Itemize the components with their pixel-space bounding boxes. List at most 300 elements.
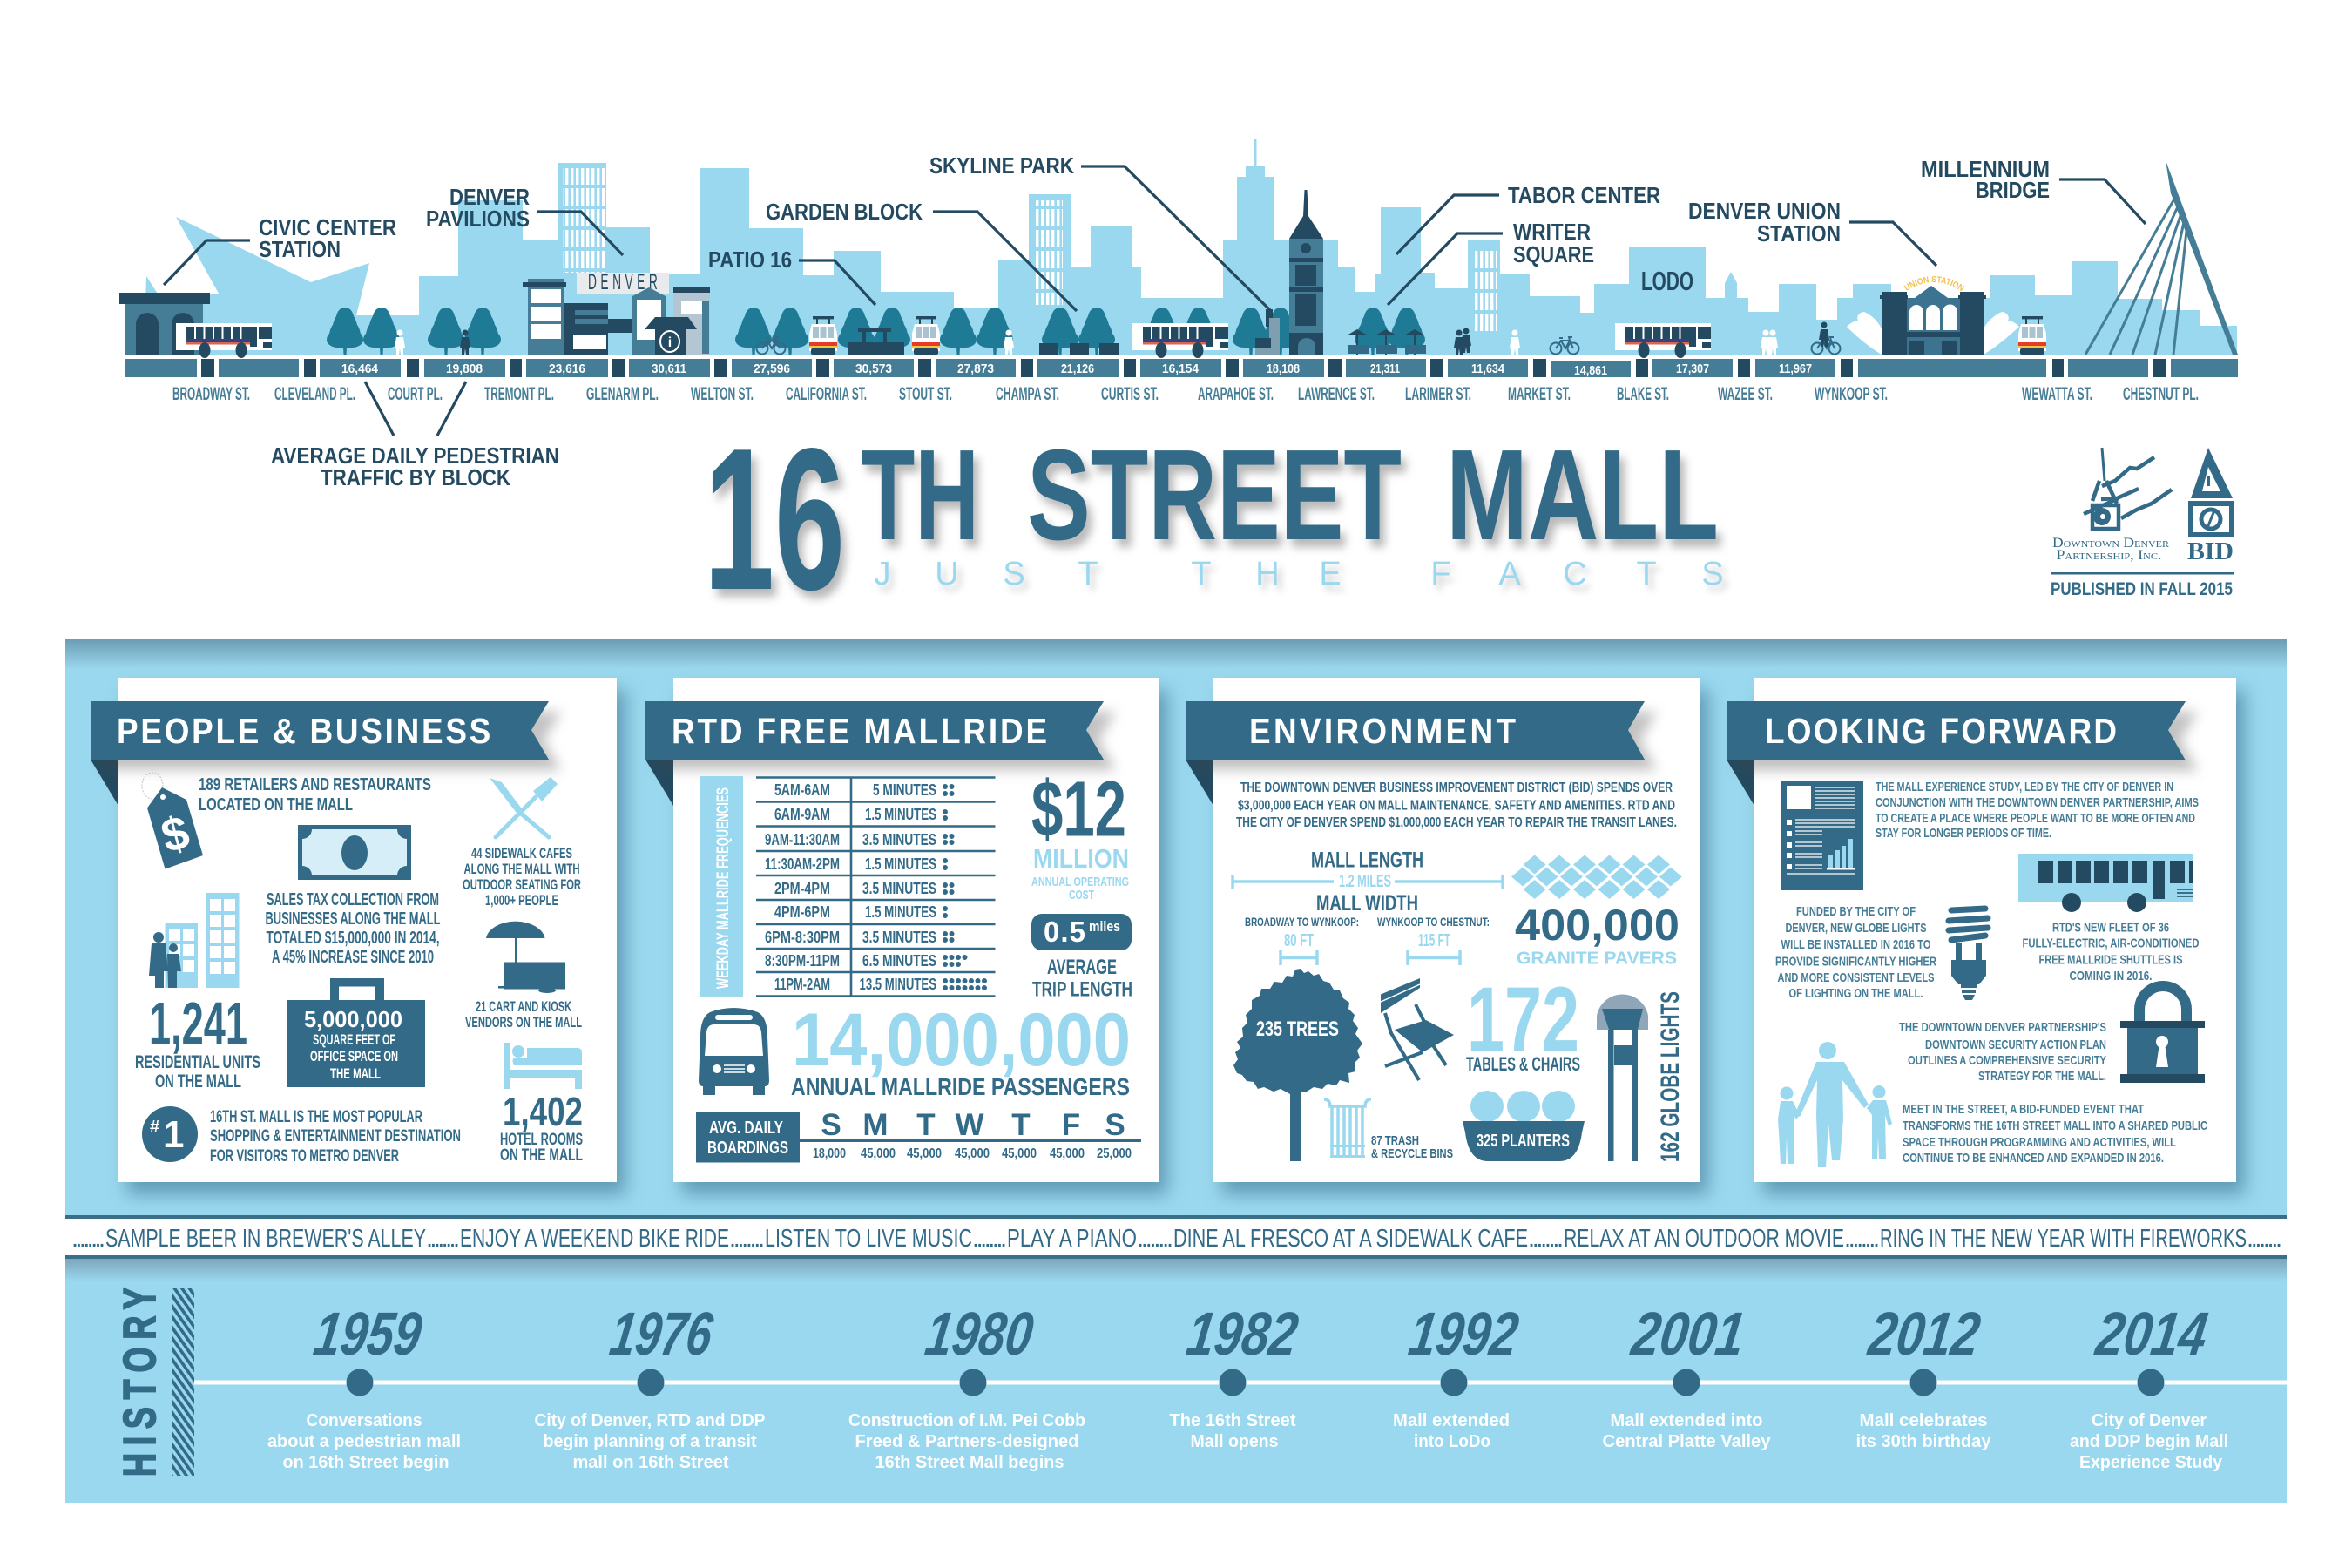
milestone 2014: 2014: [2091, 1299, 2212, 1368]
title main text: TH: [861, 423, 979, 567]
milestone 2014: Experience Study: [2079, 1453, 2223, 1472]
traffic counts: 27,873: [957, 362, 994, 376]
diagram: mall length: [1233, 848, 1503, 891]
icon: family silhouette: [1778, 1042, 1892, 1167]
table minutes column: [859, 781, 936, 993]
logo: bid tower: BID: [2187, 537, 2234, 565]
table time column: 8:30PM-11PM: [765, 952, 840, 970]
milestone 1992: Mall extended: [1393, 1411, 1510, 1430]
chart: average daily boardings: AVG. DAILY: [709, 1119, 783, 1138]
text: cart and kiosk vendors: VENDORS ON THE MALL: [465, 1014, 582, 1031]
trees: [327, 308, 1425, 355]
traffic counts: 16,154: [1162, 362, 1200, 376]
stat: 1,241 residential units: ON THE MALL: [155, 1071, 241, 1092]
title main text: MALL: [1446, 423, 1719, 567]
street names: BLAKE ST.: [1617, 384, 1669, 404]
stat: 1,241 residential units: [135, 990, 260, 1092]
milestone 1976: [535, 1299, 765, 1472]
icon: padlock: [2120, 986, 2205, 1083]
stat: annual passengers: ANNUAL MALLRIDE PASSENGERS: [791, 1073, 1130, 1100]
panel card: [1754, 678, 2236, 1182]
text: mall experience study: [1876, 780, 2199, 841]
chart: average daily boardings: 45,000: [861, 1146, 896, 1161]
activities text: SAMPLE BEER IN BREWER'S ALLEY: [105, 1225, 426, 1253]
milestone 1982: The 16th Street: [1169, 1411, 1296, 1430]
history timeline: [114, 1288, 2287, 1477]
table minutes column: 3.5 MINUTES: [862, 831, 936, 848]
milestone 1980: [848, 1299, 1085, 1472]
street names: WAZEE ST.: [1718, 384, 1773, 404]
stat: 162 globe lights: 162 GLOBE LIGHTS: [1656, 991, 1685, 1162]
traffic counts: 30,611: [652, 362, 686, 376]
chart: average daily boardings: 45,000: [1050, 1146, 1085, 1161]
activities text: ........: [729, 1225, 765, 1253]
callout: denver pavilions: [426, 184, 623, 255]
chart: average daily boardings: F: [1062, 1108, 1080, 1142]
street names: ARAPAHOE ST.: [1198, 384, 1274, 404]
icon: clock tower: [1289, 190, 1323, 355]
street names: CURTIS ST.: [1101, 384, 1159, 404]
main blue background panel: [65, 639, 2287, 1503]
street names: MARKET ST.: [1508, 384, 1571, 404]
badge: number one: #: [150, 1118, 159, 1137]
street names: BROADWAY ST.: [172, 384, 250, 404]
text: mall experience study: TO CREATE A PLACE WHERE PEOPLE WANT TO BE MORE OFTEN AND: [1876, 811, 2195, 826]
subtitle: just the facts: JUST THE FACTS: [875, 556, 1724, 592]
chart: average daily boardings: 25,000: [1097, 1146, 1132, 1161]
milestone 1959: 1959: [310, 1299, 426, 1368]
text: sales tax: A 45% INCREASE SINCE 2010: [272, 948, 434, 967]
street names: STOUT ST.: [899, 384, 952, 404]
table minutes column: 1.5 MINUTES: [865, 855, 936, 873]
milestone 1976: mall on 16th Street: [573, 1453, 729, 1472]
panel card: [118, 678, 617, 1182]
traffic counts: 16,464: [341, 362, 379, 376]
milestone 1976: begin planning of a transit: [544, 1432, 757, 1451]
diagram: mall length: 1.2 MILES: [1339, 872, 1391, 891]
icon: granite pavers diamonds: [1511, 855, 1682, 899]
stat: 1,241 residential units: RESIDENTIAL UNITS: [135, 1052, 260, 1072]
street bar with block traffic counts: [125, 359, 2238, 378]
text: mall experience study: THE MALL EXPERIENCE STUDY, LED BY THE CITY OF DENVER IN: [1876, 780, 2173, 794]
stat: 12 million operating cost: $12: [1031, 767, 1126, 854]
activities strip: [65, 1215, 2287, 1281]
diagram: mall length: MALL LENGTH: [1311, 848, 1423, 873]
stat: office space briefcase: OFFICE SPACE ON: [310, 1048, 398, 1064]
icon: denver pavilions: [523, 271, 710, 355]
text: globe lights funding: AND MORE CONSISTENT LEVELS: [1777, 970, 1934, 985]
table time column: 5AM-6AM: [774, 781, 830, 799]
stat: 172 tables and chairs: TABLES & CHAIRS: [1466, 1053, 1580, 1075]
icon: planter with count: [1463, 1091, 1585, 1161]
text: sidewalk cafes: [463, 845, 581, 909]
milestone 1976: City of Denver, RTD and DDP: [535, 1411, 765, 1430]
skyline background buildings: [144, 139, 2237, 355]
icon: tree with count: 235 TREES: [1256, 1017, 1339, 1041]
chart: average daily boardings: BOARDINGS: [707, 1139, 788, 1158]
sidebar: weekday frequencies: [700, 776, 743, 997]
table minutes column: 1.5 MINUTES: [865, 903, 936, 921]
table time column: [765, 781, 840, 993]
traffic counts: 18,108: [1267, 362, 1300, 376]
block segments: [125, 359, 2238, 377]
text: retailers: LOCATED ON THE MALL: [199, 795, 353, 814]
text: cart and kiosk vendors: 21 CART AND KIOSK: [476, 998, 571, 1015]
table minutes column: 13.5 MINUTES: [859, 976, 936, 993]
text: meet in the street: MEET IN THE STREET, A BID-FUNDED EVENT THAT: [1903, 1102, 2144, 1117]
traffic counts: 11,634: [1471, 362, 1505, 376]
icon: center bus: [1132, 323, 1228, 358]
icon: pedestrians and bikes: [395, 322, 1840, 355]
milestone 2012: its 30th birthday: [1855, 1432, 1991, 1451]
text: sales tax: TOTALED $15,000,000 IN 2014,: [267, 929, 439, 948]
title main text: [704, 407, 1719, 632]
milestone 1980: 1980: [922, 1299, 1037, 1368]
traffic counts: 19,808: [446, 362, 483, 376]
block dividers: [201, 359, 2166, 377]
diagram: mall width: 115 FT: [1418, 931, 1450, 950]
street names: CALIFORNIA ST.: [786, 384, 867, 404]
text: meet in the street: TRANSFORMS THE 16TH STREET MALL INTO A SHARED PUBLIC: [1903, 1119, 2207, 1133]
callout: writer square: WRITER: [1513, 219, 1591, 245]
table time column: 2PM-4PM: [774, 880, 830, 897]
icon: tram at union station: [2018, 316, 2046, 355]
text: retailers: 189 RETAILERS AND RESTAURANTS: [199, 775, 431, 794]
callout: tabor center: [1396, 182, 1660, 254]
chart: average daily boardings: M: [862, 1108, 889, 1142]
milestone 1992: 1992: [1405, 1299, 1523, 1368]
diagram: mall width: MALL WIDTH: [1316, 891, 1418, 916]
text: rtd new fleet: RTD'S NEW FLEET OF 36: [2052, 920, 2169, 936]
milestone 2001: Central Platte Valley: [1603, 1432, 1771, 1451]
callout: denver pavilions: PAVILIONS: [426, 206, 530, 232]
icon: bus at civic center: [176, 323, 272, 358]
callout: garden block: GARDEN BLOCK: [766, 199, 923, 225]
callout: denver union station: STATION: [1757, 220, 1841, 247]
stat: 12 million operating cost: MILLION: [1033, 843, 1129, 874]
activities text: ........: [1137, 1225, 1173, 1253]
panel: rtd free mallride: [645, 678, 1159, 1182]
icon: residential buildings: [149, 893, 239, 988]
stat: 1,402 hotel rooms: ON THE MALL: [500, 1146, 583, 1165]
activities text: ........: [1528, 1225, 1564, 1253]
panel: people and business: [91, 678, 617, 1182]
activities text: ........: [2247, 1225, 2282, 1253]
callout: patio 16: PATIO 16: [708, 247, 792, 273]
icon: planters: [1039, 343, 1119, 355]
traffic counts: 23,616: [549, 362, 585, 376]
ribbon heading: PEOPLE & BUSINESS: [117, 712, 490, 751]
street names: COURT PL.: [388, 384, 443, 404]
icon: cash bill: [298, 825, 411, 880]
activities text: ........: [972, 1225, 1007, 1253]
icon: vendor cart: [486, 922, 565, 993]
milestone 1992: [1393, 1299, 1523, 1451]
text: retailers: [199, 775, 431, 814]
icon: trash bin with count: [1324, 1099, 1453, 1161]
stat: office space briefcase: SQUARE FEET OF: [313, 1031, 395, 1048]
chart: average daily boardings: S: [1105, 1108, 1125, 1142]
icon: bus in lodo: [1615, 323, 1711, 358]
title main text: STREET: [1027, 423, 1402, 567]
street names: GLENARM PL.: [586, 384, 659, 404]
text: cart and kiosk vendors: [465, 998, 582, 1031]
text: sales tax: [265, 890, 441, 967]
milestone 2001: Mall extended into: [1610, 1411, 1763, 1430]
text: most popular: [210, 1108, 461, 1166]
text: globe lights funding: [1775, 904, 1936, 1001]
activities text: PLAY A PIANO: [1007, 1225, 1137, 1253]
text: most popular: 16TH ST. MALL IS THE MOST POPULAR: [210, 1108, 422, 1126]
stat: office space briefcase: [287, 978, 425, 1087]
text: sidewalk cafes: 1,000+ PEOPLE: [485, 892, 558, 909]
panel card: [673, 678, 1159, 1182]
logo: downtown denver partnership: Partnership, Inc.: [2056, 548, 2162, 563]
icon: knife and fork: [490, 777, 558, 837]
chart: average daily boardings: 45,000: [955, 1146, 990, 1161]
title: [704, 407, 1724, 632]
icon: millennium bridge: [2085, 160, 2238, 355]
traffic counts: 11,967: [1779, 362, 1812, 376]
milestone 1959: on 16th Street begin: [282, 1453, 449, 1472]
callout: denver union station: [1688, 198, 1936, 266]
chart: average daily boardings: 45,000: [907, 1146, 942, 1161]
milestone 1980: Freed & Partners-designed: [855, 1432, 1078, 1451]
text: sidewalk cafes: OUTDOOR SEATING FOR: [463, 876, 581, 893]
table time column: 6PM-8:30PM: [765, 929, 840, 946]
icon: denver pavilions: DENVER: [588, 271, 658, 294]
traffic counts: 27,596: [754, 362, 790, 376]
timeline axis: [194, 1380, 2287, 1385]
street names: LAWRENCE ST.: [1298, 384, 1375, 404]
stat: annual passengers: 14,000,000: [792, 998, 1131, 1082]
stat: 1,402 hotel rooms: HOTEL ROOMS: [500, 1131, 583, 1149]
icon: bus front: [699, 1008, 769, 1095]
text: security plan: STRATEGY FOR THE MALL.: [1978, 1069, 2106, 1084]
text: meet in the street: SPACE THROUGH PROGRAMMING AND ACTIVITIES, WILL: [1903, 1135, 2176, 1150]
callout: average daily pedestrian traffic: [271, 382, 559, 490]
frequency table: [756, 777, 995, 997]
milestone 2012: [1855, 1299, 1991, 1451]
table minutes column: 3.5 MINUTES: [862, 880, 936, 897]
white cutouts near museum: [162, 217, 219, 301]
callout: millennium bridge: [1921, 156, 2146, 224]
traffic counts: 30,573: [855, 362, 892, 376]
callout: denver pavilions: DENVER: [449, 184, 530, 210]
skyline illustration: [119, 139, 2238, 358]
text: globe lights funding: OF LIGHTING ON THE MALL.: [1789, 986, 1923, 1001]
stat: office space briefcase: 5,000,000: [304, 1006, 402, 1032]
activities text: ENJOY A WEEKEND BIKE RIDE: [460, 1225, 729, 1253]
text: rtd new fleet: FULLY-ELECTRIC, AIR-CONDITIONED: [2023, 936, 2200, 951]
activities text: RELAX AT AN OUTDOOR MOVIE: [1564, 1225, 1844, 1253]
table minutes column: 5 MINUTES: [873, 781, 936, 799]
milestone 2014: and DDP begin Mall: [2070, 1432, 2228, 1451]
chart: average daily boardings: T: [1011, 1108, 1031, 1142]
stat: 12 million operating cost: ANNUAL OPERATING: [1031, 875, 1129, 889]
icon: tree with count: [1233, 969, 1362, 1161]
street names: LARIMER ST.: [1405, 384, 1471, 404]
milestone 1959: about a pedestrian mall: [267, 1432, 461, 1451]
text: sales tax: BUSINESSES ALONG THE MALL: [265, 909, 441, 929]
text: security plan: THE DOWNTOWN DENVER PARTNERSHIP'S: [1899, 1020, 2106, 1035]
ribbon heading: ENVIRONMENT: [1249, 712, 1516, 751]
landmark callouts: [164, 152, 2146, 490]
callout: skyline park: SKYLINE PARK: [929, 152, 1074, 179]
activities text: ........: [71, 1225, 105, 1253]
text: globe lights funding: PROVIDE SIGNIFICANTLY HIGHER: [1775, 955, 1936, 969]
icon: skyline park monument: [1255, 309, 1280, 355]
diagram: mall width: 80 FT: [1284, 931, 1314, 950]
text: sidewalk cafes: 44 SIDEWALK CAFES: [471, 845, 572, 862]
stat: 400,000 granite pavers: [1515, 901, 1680, 969]
milestone 1982: [1169, 1299, 1302, 1451]
label: lodo: LODO: [1641, 266, 1693, 296]
activities text: ........: [1844, 1225, 1880, 1253]
milestone 2012: Mall celebrates: [1859, 1411, 1988, 1430]
ribbon heading: [1727, 701, 2186, 806]
icon: union station: [1847, 276, 2019, 355]
table minutes column: 3.5 MINUTES: [862, 929, 936, 946]
callout: patio 16: [708, 247, 875, 305]
stat: average trip length: [1031, 914, 1132, 1002]
text: rtd new fleet: FREE MALLRIDE SHUTTLES IS: [2038, 953, 2183, 967]
icon: planter with count: 325 PLANTERS: [1477, 1132, 1570, 1151]
badge: number one: [142, 1106, 198, 1162]
badge: number one: 1: [163, 1113, 184, 1156]
text: bid spending: [1236, 781, 1677, 830]
traffic counts: 21,311: [1370, 362, 1400, 376]
icon: tram and patio: [809, 316, 940, 355]
activities text: [71, 1225, 2282, 1253]
milestone 1980: Construction of I.M. Pei Cobb: [848, 1411, 1085, 1430]
diagram: mall width: BROADWAY TO WYNKOOP:: [1245, 915, 1359, 929]
logo: downtown denver partnership: Downtown Denver: [2052, 536, 2170, 551]
text: security plan: [1899, 1020, 2106, 1084]
table time column: 4PM-6PM: [774, 903, 830, 921]
diagram: mall width: WYNKOOP TO CHESTNUT:: [1377, 915, 1490, 929]
text: rtd new fleet: COMING IN 2016.: [2070, 969, 2152, 983]
stat: 1,402 hotel rooms: 1,402: [503, 1089, 583, 1134]
milestone 1959: Conversations: [307, 1411, 422, 1430]
text: mall experience study: STAY FOR LONGER PERIODS OF TIME.: [1876, 826, 2051, 841]
chart: average daily boardings: [696, 1108, 1141, 1162]
stat: 12 million operating cost: [1031, 767, 1129, 902]
callout: tabor center: TABOR CENTER: [1508, 182, 1660, 208]
text: meet in the street: [1903, 1102, 2207, 1166]
table time column: 11PM-2AM: [774, 976, 830, 993]
text: most popular: FOR VISITORS TO METRO DENVER: [210, 1147, 399, 1166]
stat: average trip length: AVERAGE: [1047, 956, 1117, 979]
milestone 1982: 1982: [1183, 1299, 1302, 1368]
text: sidewalk cafes: ALONG THE MALL WITH: [463, 861, 580, 877]
panel: looking forward: [1727, 678, 2236, 1182]
icon: light bulb: [1949, 909, 1988, 1000]
activities text: LISTEN TO LIVE MUSIC: [765, 1225, 972, 1253]
panel card: [1213, 678, 1700, 1182]
text: most popular: SHOPPING & ENTERTAINMENT DESTINATION: [210, 1127, 461, 1146]
callout: denver union station: DENVER UNION: [1688, 198, 1841, 224]
callout: writer square: SQUARE: [1513, 241, 1594, 267]
diagram: mall width: [1245, 891, 1490, 965]
icon: trash bin with count: & RECYCLE BINS: [1371, 1146, 1453, 1161]
traffic counts: [341, 362, 1812, 378]
ribbon heading: LOOKING FORWARD: [1765, 712, 2117, 751]
callout: writer square: [1388, 219, 1594, 305]
text: globe lights funding: WILL BE INSTALLED IN 2016 TO: [1781, 937, 1931, 952]
callout: skyline park: [929, 152, 1271, 311]
ribbon heading: RTD FREE MALLRIDE: [672, 712, 1047, 751]
table minutes column: 1.5 MINUTES: [865, 806, 936, 823]
callout: millennium bridge: BRIDGE: [1976, 177, 2050, 203]
street names: CLEVELAND PL.: [274, 384, 355, 404]
text: mall experience study: CONJUNCTION WITH THE DOWNTOWN DENVER PARTNERSHIP, AIMS: [1876, 795, 2199, 810]
milestone 1982: Mall opens: [1190, 1432, 1279, 1451]
stat: 1,241 residential units: 1,241: [149, 990, 247, 1058]
callout: average daily pedestrian traffic: TRAFFIC BY BLOCK: [321, 464, 510, 490]
street names: WEWATTA ST.: [2022, 384, 2092, 404]
callout: civic center station: CIVIC CENTER: [259, 214, 396, 240]
table rules: [756, 777, 995, 997]
street names: WYNKOOP ST.: [1815, 384, 1888, 404]
text: globe lights funding: DENVER, NEW GLOBE LIGHTS: [1786, 921, 1927, 936]
milestone 2014: City of Denver: [2092, 1411, 2207, 1430]
icon: price tag: $: [156, 806, 195, 863]
callout: garden block: [766, 199, 1077, 311]
text: bid spending: THE DOWNTOWN DENVER BUSINESS IMPROVEMENT DISTRICT (BID) SPENDS OVER: [1240, 781, 1673, 795]
published note: PUBLISHED IN FALL 2015: [2051, 579, 2233, 599]
logo: bid tower: [2187, 448, 2234, 565]
icon: union station: UNION STATION: [1903, 276, 1964, 291]
icon: report document: [1781, 781, 1863, 890]
chart: average daily boardings: S: [821, 1108, 841, 1142]
milestone 2001: 2001: [1626, 1299, 1749, 1368]
chart: average daily boardings: 45,000: [1002, 1146, 1037, 1161]
stat: average trip length: 0.5: [1044, 916, 1085, 948]
milestone 1959: [267, 1299, 461, 1472]
milestone 2001: [1603, 1299, 1771, 1451]
chart: average daily boardings: W: [955, 1108, 984, 1142]
milestone 2012: 2012: [1863, 1299, 1984, 1368]
stat: 1,402 hotel rooms: [500, 1089, 583, 1165]
callout: average daily pedestrian traffic: AVERAGE DAILY PEDESTRIAN: [271, 443, 559, 469]
tower windows: [563, 168, 605, 273]
icon: hotel bed: [504, 1043, 582, 1089]
traffic counts: 14,861: [1574, 363, 1607, 378]
text: security plan: DOWNTOWN SECURITY ACTION PLAN: [1925, 1037, 2106, 1052]
icon: electric shuttle bus: [2018, 854, 2193, 912]
street names: [172, 384, 2199, 404]
milestone 1992: into LoDo: [1414, 1432, 1490, 1451]
title main text: 16: [704, 407, 845, 632]
text: bid spending: $3,000,000 EACH YEAR ON MALL MAINTENANCE, SAFETY AND AMENITIES. RTD AND: [1238, 798, 1675, 814]
milestone 2014: [2070, 1299, 2228, 1472]
panel: environment: [1186, 678, 1700, 1182]
chart: average daily boardings: T: [916, 1108, 936, 1142]
icon: denver pavilions: i: [668, 335, 672, 350]
street names: WELTON ST.: [691, 384, 754, 404]
ribbon heading: [645, 701, 1104, 806]
callout: civic center station: [164, 214, 396, 285]
stat: 12 million operating cost: COST: [1069, 888, 1094, 902]
icon: sidewalk cafe umbrellas: [1347, 329, 1426, 355]
street names: CHAMPA ST.: [996, 384, 1059, 404]
stat: office space briefcase: THE MALL: [330, 1065, 381, 1082]
logo: downtown denver partnership: [2052, 448, 2172, 563]
text: bid spending: THE CITY OF DENVER SPEND $1,000,000 EACH YEAR TO REPAIR THE TRANSIT LANES.: [1236, 815, 1677, 830]
icon: globe light: [1597, 994, 1648, 1161]
milestone 1976: 1976: [606, 1299, 718, 1368]
